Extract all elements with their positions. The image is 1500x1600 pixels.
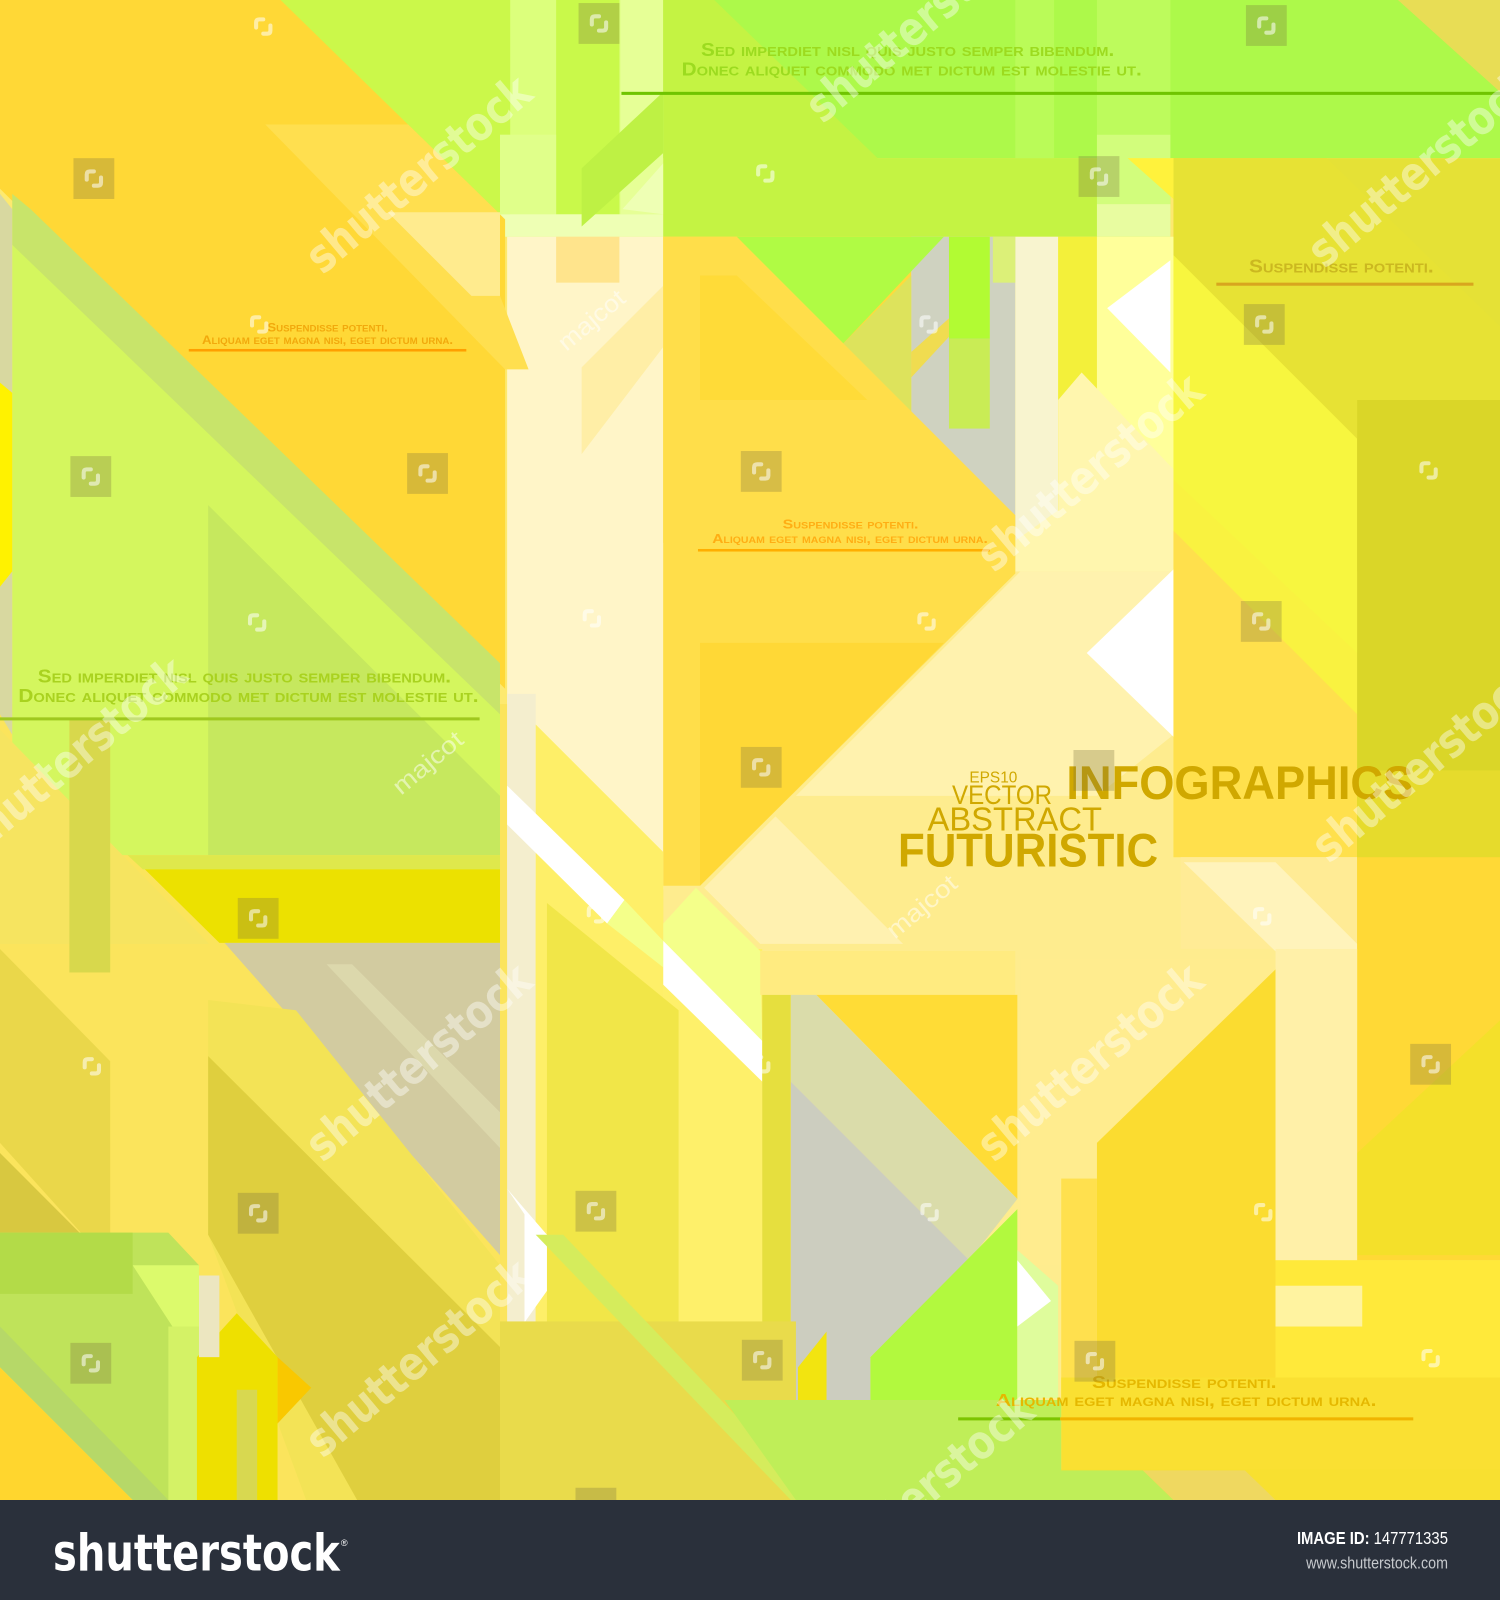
title word cloud <box>898 757 1413 876</box>
watermark: shutterstock repeated: shutterstock <box>295 1247 544 1468</box>
title word cloud: INFOGRAPHICS <box>1066 757 1413 809</box>
title word cloud: EPS10 <box>969 770 1017 787</box>
label: left green panel: Sed imperdiet nisl quis justo semper bibendum. <box>38 666 451 687</box>
label: left green panel <box>0 666 480 720</box>
watermark: shutterstock repeated: shutterstock <box>797 1382 1046 1600</box>
website: www.shutterstock.com <box>1305 1554 1448 1572</box>
watermark: shutterstock repeated: shutterstock <box>966 361 1215 583</box>
label: centre orange: Aliquam eget magna nisi, eget dictum urna. <box>712 531 988 546</box>
watermark: majcot: majcot <box>388 726 469 801</box>
registered mark: ® <box>341 1538 348 1548</box>
label: centre orange: Suspendisse potenti. <box>783 517 918 532</box>
label: bottom right: Suspendisse potenti. <box>1092 1372 1277 1392</box>
label: upper green bar: Sed imperdiet nisl quis justo semper bibendum. <box>701 39 1114 60</box>
label: bottom right <box>958 1372 1413 1420</box>
watermark logo marks <box>84 16 1438 1370</box>
label: left green panel: Donec aliquet commodo met dictum est molestie ut. <box>18 685 479 706</box>
watermark: shutterstock repeated: shutterstock <box>966 951 1215 1172</box>
image id: IMAGE ID: 147771335 <box>1297 1528 1448 1548</box>
footer logo: shutterstock: shutterstock <box>53 1524 341 1583</box>
label: upper green bar <box>621 39 1500 95</box>
title word cloud: FUTURISTIC <box>898 824 1158 876</box>
title word cloud: VECTOR <box>952 780 1052 810</box>
watermark: majcot <box>388 285 963 944</box>
title word cloud: ABSTRACT <box>928 802 1102 839</box>
footer bar <box>0 1500 1500 1600</box>
watermark: majcot: majcot <box>881 870 963 944</box>
label: bottom right: Aliquam eget magna nisi, eget dictum urna. <box>996 1390 1377 1410</box>
watermark: majcot: majcot <box>553 285 631 357</box>
label: upper left orange <box>189 321 466 352</box>
label: upper left orange: Aliquam eget magna nisi, eget dictum urna. <box>202 333 453 347</box>
watermark: shutterstock repeated: shutterstock <box>295 951 544 1172</box>
label: centre orange <box>698 517 990 552</box>
label: upper green bar: Donec aliquet commodo met dictum est molestie ut. <box>682 59 1142 80</box>
label: upper right <box>1216 255 1473 286</box>
label: upper right: Suspendisse potenti. <box>1249 255 1434 276</box>
label: upper left orange: Suspendisse potenti. <box>267 321 388 335</box>
watermark: shutterstock repeated: shutterstock <box>295 63 544 285</box>
